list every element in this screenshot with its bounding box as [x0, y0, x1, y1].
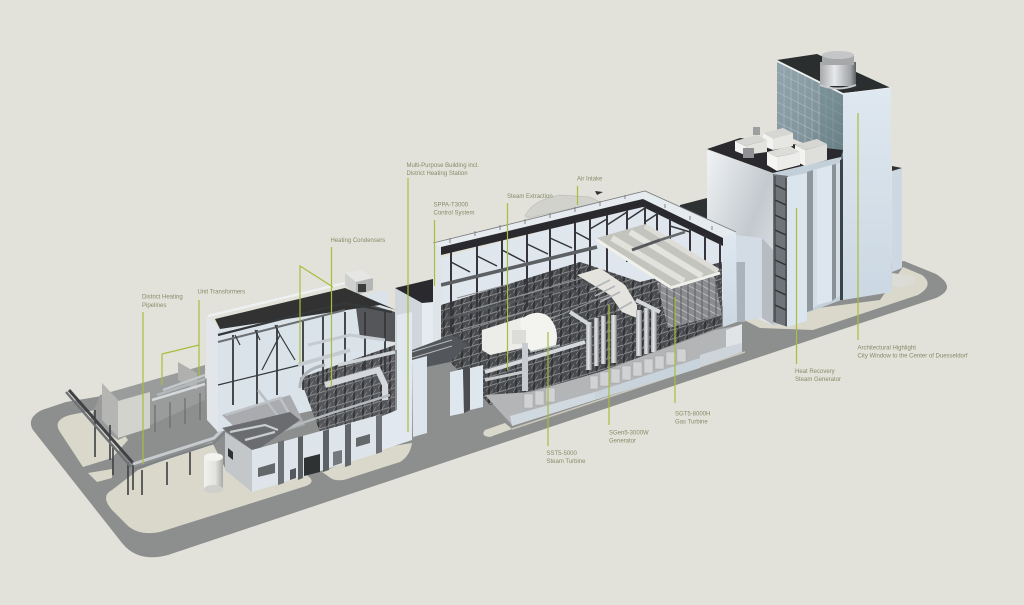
back wing of tower — [892, 166, 914, 288]
turbine white wall — [482, 317, 523, 355]
leader lines — [143, 113, 858, 464]
condenser pipes — [225, 335, 395, 437]
heating condenser hall — [204, 270, 412, 493]
left column wall — [433, 243, 441, 345]
lower floor — [222, 395, 305, 442]
small mast on hall roof — [595, 191, 603, 195]
facade panels — [787, 159, 843, 327]
label: steam turbine: SST5-5000 — [546, 451, 577, 457]
fascia — [208, 283, 345, 316]
right wall — [723, 233, 737, 327]
generator ducts — [586, 308, 657, 370]
roof fascia — [433, 191, 736, 255]
multi-purpose building — [395, 279, 433, 350]
overhead crane — [597, 224, 720, 288]
label: district heating pipelines: Pipelines — [142, 303, 166, 309]
district heating pipelines — [66, 390, 245, 495]
label: heat recovery steam generator: Steam Generator — [795, 377, 841, 383]
label: gas turbine: SGT5-8000H — [675, 412, 710, 418]
vertical pipe — [522, 343, 528, 391]
steel cage lower right — [300, 345, 395, 432]
icon: steam turbine casing — [520, 313, 557, 352]
label: SPPA-T3000: Control System — [434, 210, 475, 216]
auxiliary units row — [524, 349, 686, 408]
right facade — [773, 157, 841, 326]
label: district heating pipelines: District Heating — [142, 294, 183, 300]
back wall — [441, 205, 724, 340]
front wall panels — [450, 369, 464, 416]
air intake — [525, 195, 600, 218]
back wall — [217, 290, 395, 432]
steam pipes — [485, 342, 585, 372]
label: heating condensers: Heating Condensers — [330, 238, 385, 244]
label: generator: SGen5-3000W — [609, 430, 649, 436]
heating hall side panel — [412, 356, 427, 437]
rooftop box — [345, 270, 373, 295]
label: unit transformers: Unit Transformers — [198, 290, 245, 296]
right front wall — [380, 312, 412, 450]
label: generator: Generator — [609, 438, 636, 444]
label: multi-purpose building: Multi-Purpose Building incl. — [406, 163, 479, 169]
steel frame — [441, 206, 720, 340]
main turbine hall — [433, 191, 742, 426]
heat recovery steam generator building — [707, 127, 843, 327]
annex box — [726, 324, 742, 347]
machinery zone — [441, 262, 722, 405]
machinery lines — [530, 280, 632, 352]
windows — [258, 463, 275, 477]
annex between hall and HRSG — [680, 198, 773, 325]
lower block left wall — [225, 432, 252, 492]
icon: roof tank — [820, 51, 856, 88]
hall ceiling — [215, 288, 396, 329]
base platform — [485, 325, 742, 425]
air duct — [577, 268, 637, 318]
steel cage upper right — [355, 300, 395, 342]
road edge highlight — [512, 352, 745, 429]
site road — [31, 261, 947, 557]
label: gas turbine: Gas Turbine — [675, 420, 708, 426]
label: heat recovery steam generator: Heat Recovery — [795, 369, 835, 375]
label: multi-purpose building: District Heating Station — [406, 171, 468, 177]
label: architectural highlight: City Window to the Center of Duesseldorf — [858, 354, 968, 360]
city window glass facade — [777, 62, 843, 160]
lower block roof — [222, 412, 300, 450]
steel frame — [218, 303, 392, 405]
left wall — [707, 150, 773, 325]
lower block front wall — [228, 414, 382, 492]
label: architectural highlight: Architectural Highlight — [858, 346, 916, 352]
label: air intake: Air Intake — [577, 176, 603, 182]
tower roof — [777, 54, 891, 93]
link conveyor between halls — [412, 335, 468, 370]
ground pads — [58, 267, 928, 533]
roof — [707, 138, 843, 173]
exhaust casing — [512, 330, 526, 344]
label: SPPA-T3000: SPPA-T3000 — [434, 202, 468, 208]
label: steam extraction: Steam Extraction — [507, 194, 553, 200]
hall left wall — [206, 315, 218, 432]
label: steam turbine: Steam Turbine — [546, 459, 586, 465]
back transformer area — [90, 362, 205, 440]
front low wall — [510, 392, 595, 426]
access tower steel — [773, 174, 788, 327]
tower front wall — [843, 88, 892, 300]
icon: storage tank — [204, 453, 223, 493]
rooftop units — [735, 127, 827, 171]
transformer pipe bundle — [152, 375, 205, 400]
architectural tower — [777, 51, 914, 300]
